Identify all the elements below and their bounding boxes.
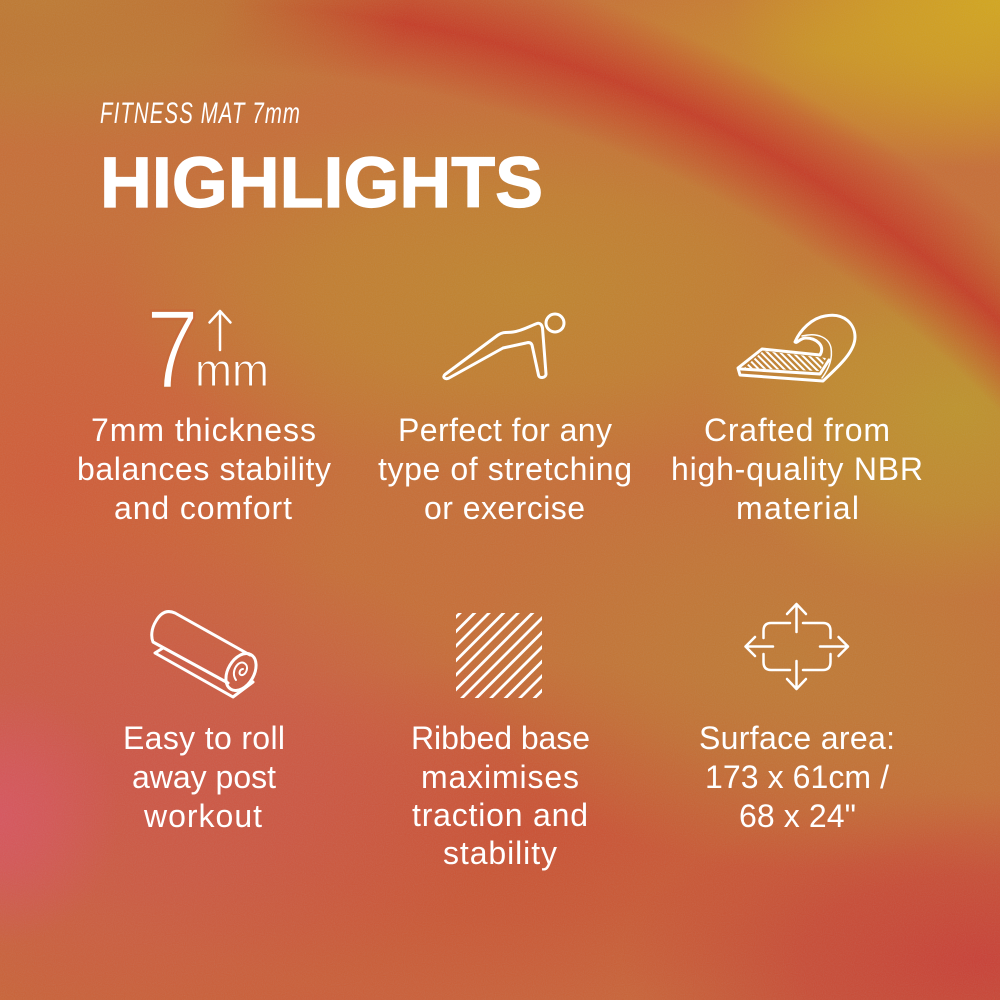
text: ribbed base: maximises: [421, 759, 579, 795]
panel: roll: [123, 612, 285, 834]
text: material: Crafted from: [704, 412, 890, 448]
text: material: [671, 412, 923, 526]
text: ribbed base: Ribbed base: [411, 720, 590, 756]
icon: 7mm with up arrow: mm: [195, 344, 269, 396]
text: ribbed base: traction and: [412, 797, 588, 833]
text: stretching: Perfect for any: [398, 412, 612, 448]
panel: material: [671, 315, 923, 526]
text: surface area: 68 x 24": [739, 798, 856, 834]
text: thickness: 7mm thickness: [91, 412, 316, 448]
panel: stretching: [378, 314, 632, 526]
panel: thickness: [77, 287, 331, 526]
text: roll: Easy to roll: [123, 720, 285, 756]
panel: surface area: [699, 604, 895, 834]
title: HIGHLIGHTS: [100, 144, 543, 223]
icon: 7mm with up arrow: [146, 287, 269, 412]
text: thickness: [77, 412, 331, 526]
subtitle: FITNESS MAT 7mm: [100, 97, 300, 130]
text: material: high-quality NBR: [671, 451, 923, 487]
text: roll: [123, 720, 285, 834]
text: surface area: 173 x 61cm /: [705, 759, 889, 795]
icon: rolled mat: [152, 612, 262, 697]
panel: ribbed base: [412, 613, 589, 870]
text: stretching: [378, 412, 632, 526]
icon: 7mm with up arrow: 7: [146, 287, 199, 412]
text: material: material: [736, 490, 859, 526]
text: thickness: balances stability: [77, 451, 331, 487]
text: roll: away post: [132, 759, 276, 795]
icon: mat cross-section: [738, 315, 855, 381]
text: ribbed base: stability: [443, 835, 557, 871]
text: surface area: Surface area:: [699, 720, 895, 756]
text: ribbed base: [411, 720, 590, 871]
text: stretching: or exercise: [424, 490, 585, 526]
icon: diagonal ribs: [456, 613, 542, 698]
icon: person stretching: [444, 314, 564, 379]
text: surface area: [699, 720, 895, 834]
text: roll: workout: [143, 798, 262, 834]
text: stretching: type of stretching: [378, 451, 632, 487]
icon: expanding arrows: [746, 604, 848, 689]
text: thickness: and comfort: [114, 490, 292, 526]
